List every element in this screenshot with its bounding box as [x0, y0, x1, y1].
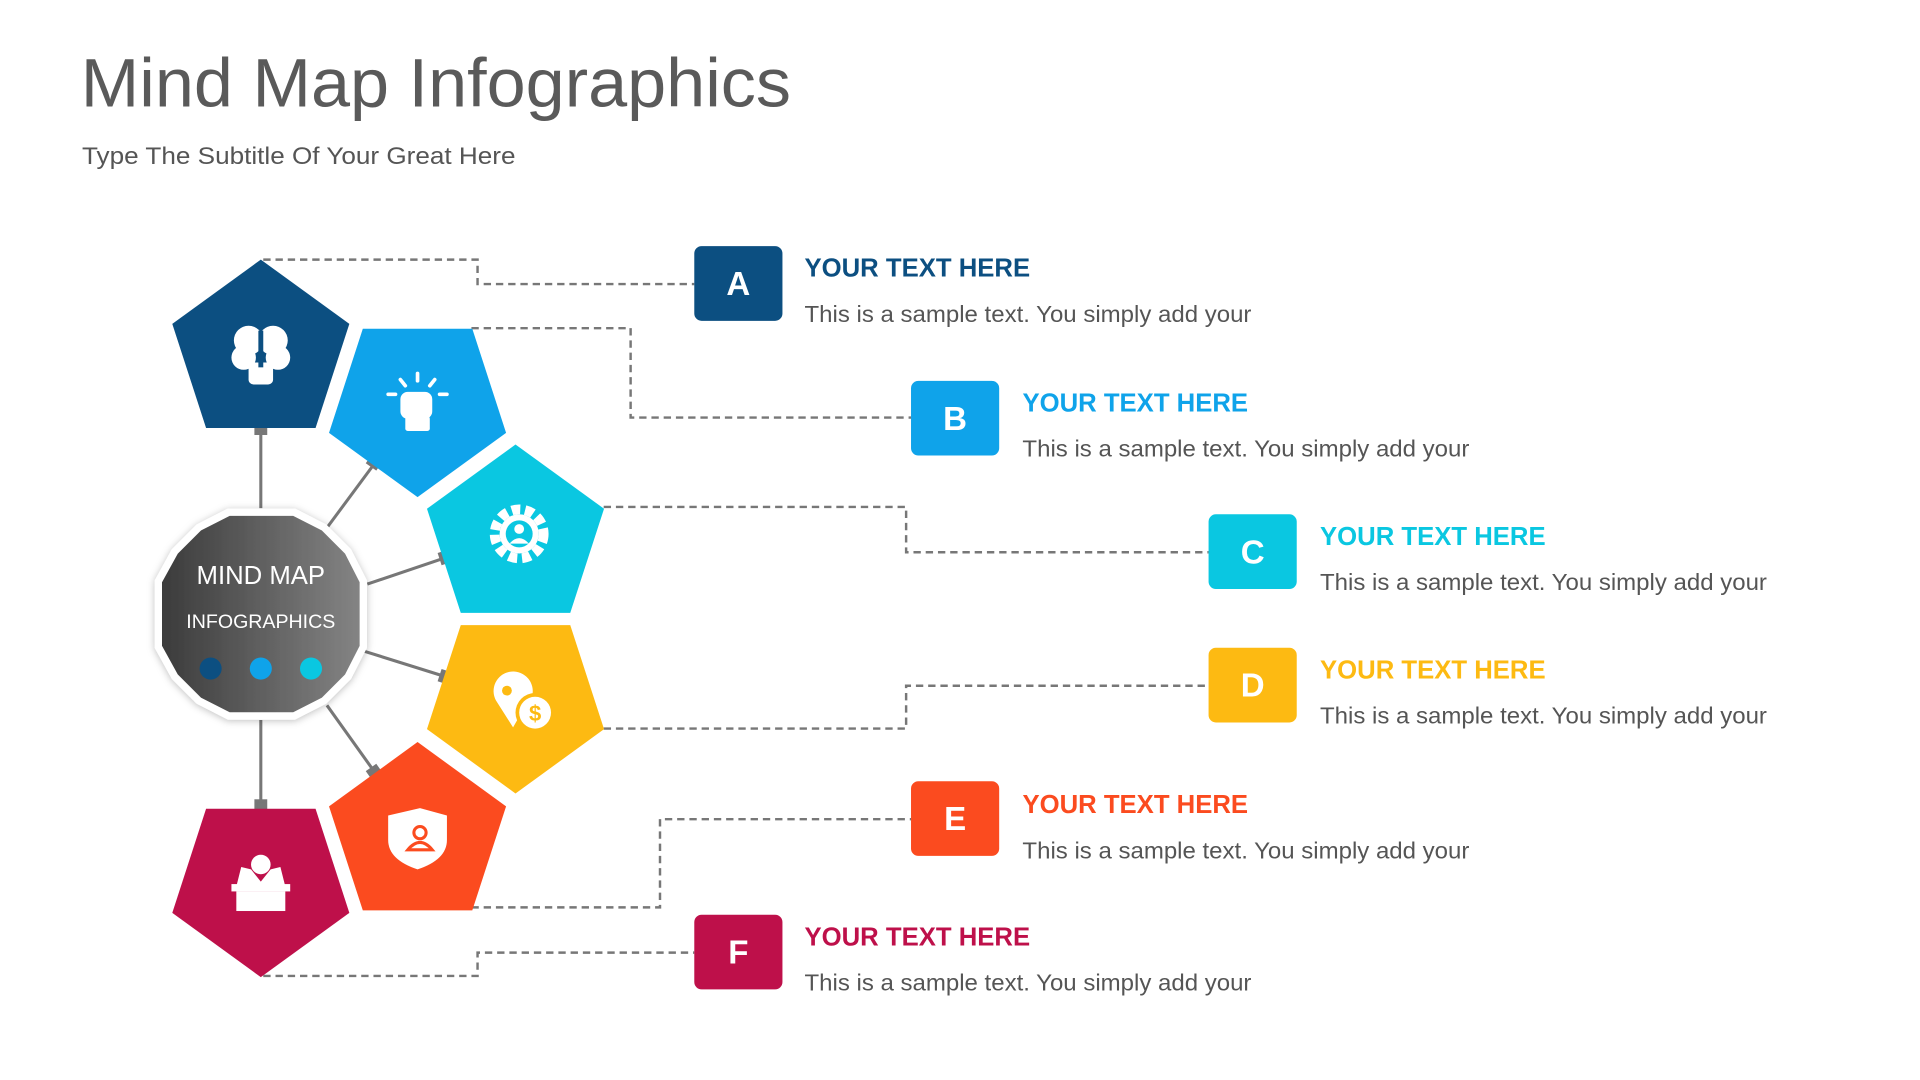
item D [1209, 648, 1767, 729]
item A [694, 246, 1252, 327]
pentagon E [329, 742, 506, 910]
item E: YOUR TEXT HERE [1022, 791, 1248, 819]
center hub [158, 512, 363, 716]
item D: D [1241, 668, 1265, 705]
hub dots [200, 658, 222, 680]
item A: YOUR TEXT HERE [804, 255, 1030, 283]
item C: YOUR TEXT HERE [1320, 523, 1546, 551]
item E [911, 781, 1470, 863]
icon: brain [231, 326, 290, 384]
pentagon B [329, 329, 506, 497]
item E: E [944, 801, 966, 838]
icon: fist [388, 373, 447, 431]
item F: YOUR TEXT HERE [804, 923, 1030, 951]
center hub: INFOGRAPHICS [186, 611, 335, 633]
item B: B [943, 401, 967, 438]
pentagon C [427, 444, 604, 613]
icon: speaker at desk [231, 855, 290, 911]
item B [911, 381, 1470, 462]
title: Mind Map Infographics [81, 45, 791, 122]
icon: shield [388, 808, 447, 869]
item E: This is a sample text. You simply add your [1022, 837, 1470, 863]
subtitle: Type The Subtitle Of Your Great Here [82, 143, 516, 170]
hub text: MIND MAP [197, 562, 325, 590]
icon: pin with dollar [494, 672, 555, 732]
item A: A [726, 266, 750, 303]
item A: This is a sample text. You simply add your [804, 301, 1252, 327]
dashed connectors [263, 260, 1209, 976]
item D: This is a sample text. You simply add your [1320, 703, 1767, 729]
pentagon A [172, 260, 349, 428]
icon: pin with dollar: $ [529, 701, 541, 726]
item C: This is a sample text. You simply add your [1320, 569, 1767, 595]
item D: YOUR TEXT HERE [1320, 656, 1546, 684]
item F [694, 915, 1252, 996]
item C [1209, 514, 1767, 595]
pentagon D [427, 625, 604, 793]
icon: gear [495, 509, 544, 558]
pentagon F [172, 809, 349, 977]
item B: This is a sample text. You simply add your [1022, 436, 1470, 462]
item F: F [728, 935, 748, 972]
item C: C [1241, 534, 1265, 571]
item B: YOUR TEXT HERE [1022, 389, 1248, 417]
item F: This is a sample text. You simply add your [804, 970, 1252, 996]
spokes [256, 424, 452, 811]
